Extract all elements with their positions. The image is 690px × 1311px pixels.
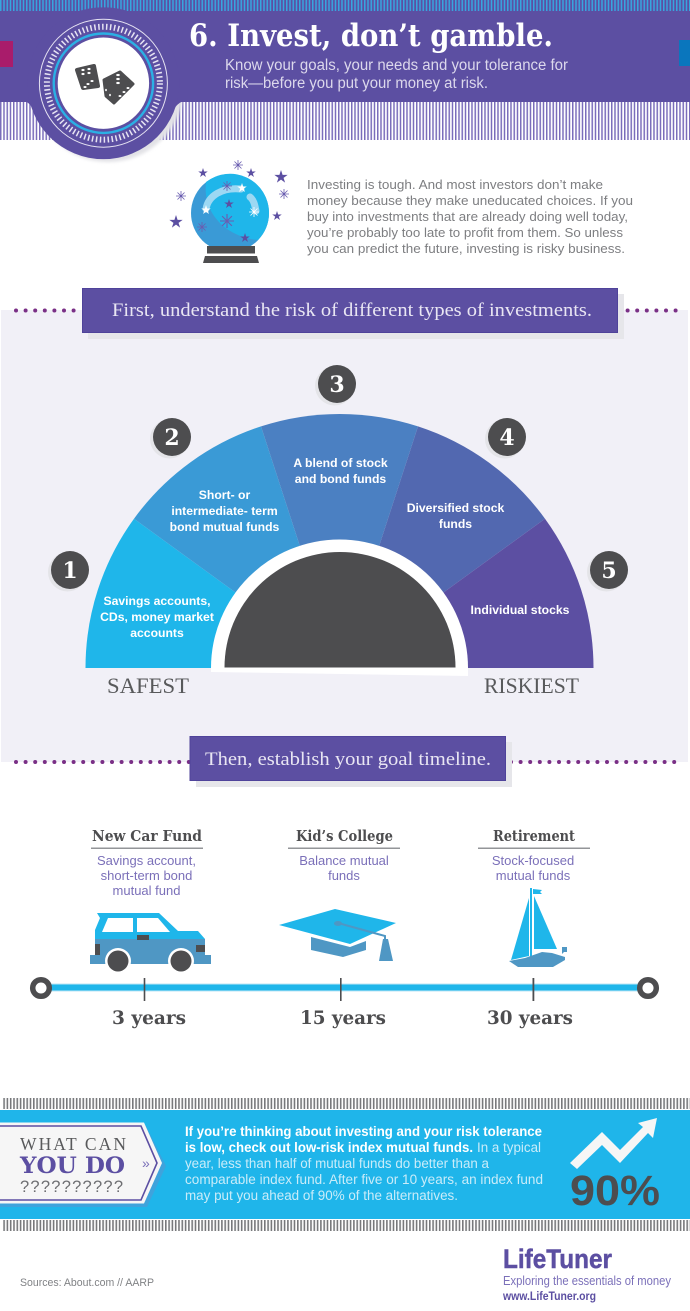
badge: number 5: 5 <box>601 558 617 584</box>
icon: rising arrow <box>570 1118 657 1169</box>
dotted rule: first banner <box>16 308 677 312</box>
chart: risk gauge <box>86 414 594 676</box>
panel: risk section background <box>1 310 688 762</box>
logo: LifeTuner: LifeTuner <box>503 1244 612 1274</box>
label: segment 2 <box>170 488 280 534</box>
icon: car <box>90 913 211 974</box>
badge: number 4: 4 <box>499 425 515 451</box>
badge: number 3: 3 <box>329 372 345 398</box>
badge: number 3 <box>315 365 356 406</box>
text block: index fund advice: In a typical <box>477 1140 541 1155</box>
callout: what can you do tag: YOU DO <box>19 1153 125 1179</box>
label: segment 2: bond mutual funds <box>170 520 280 534</box>
text block: index fund advice: year, less than half of mutual funds do better than a <box>185 1156 489 1171</box>
text: sources: Sources: About.com // AARP <box>20 1277 154 1289</box>
label: segment 3 <box>293 456 388 486</box>
label: segment 2: Short- or <box>199 488 250 502</box>
panel: what can you do band <box>0 1098 690 1231</box>
icon: magenta side tab <box>0 41 13 67</box>
text block: intro paragraph: Investing is tough. And most investors don’t make <box>307 177 603 192</box>
label: segment 4: funds <box>439 517 472 531</box>
subtitle: Know your goals, your needs and your tolerance for <box>225 57 568 74</box>
text block: index fund advice: If you’re thinking about investing and your risk tolerance <box>185 1124 542 1139</box>
label: segment 1: accounts <box>130 626 184 640</box>
label: segment 4: Diversified stock <box>407 501 504 515</box>
column: new car fund: mutual fund <box>113 883 180 898</box>
column: new car fund: New Car Fund <box>92 828 202 845</box>
text block: intro paragraph <box>307 177 633 256</box>
icon: dice medallion <box>39 19 167 147</box>
label: riskiest: RISKIEST <box>484 673 580 698</box>
badge: number 4 <box>485 418 526 458</box>
text block: index fund advice: is low, check out low-risk index mutual funds. <box>185 1140 473 1155</box>
banner: goal timeline <box>190 736 512 787</box>
column: new car fund <box>91 828 203 898</box>
text block: intro paragraph: money because they make uneducated choices. If you <box>307 193 633 208</box>
callout: what can you do tag: ?????????? <box>20 1178 123 1196</box>
column: retirement <box>478 828 590 883</box>
icon: crystal ball <box>169 160 289 263</box>
badge: number 2: 2 <box>164 425 180 451</box>
callout: what can you do tag: » <box>142 1155 150 1171</box>
icon: graduation cap <box>279 909 396 961</box>
label: segment 1 <box>100 594 214 640</box>
column: new car fund: Savings account, <box>97 853 196 868</box>
badge: number 5 <box>587 551 628 592</box>
label: segment 4 <box>407 501 504 531</box>
badge: number 1 <box>48 551 89 592</box>
label: segment 2: intermediate- term <box>171 504 278 518</box>
text block: intro paragraph: you can predict the future, investing is risky business. <box>307 241 625 256</box>
header band <box>0 0 690 162</box>
stat: 90%: 90% <box>570 1167 660 1215</box>
banner: understand the risk: First, understand the risk of different types of investments. <box>112 301 592 321</box>
banner: understand the risk <box>82 288 624 339</box>
label: segment 3: A blend of stock <box>293 456 388 470</box>
column: kid's college: funds <box>328 868 360 883</box>
label: segment 1: CDs, money market <box>100 610 214 624</box>
icon: sailboat <box>509 888 567 967</box>
logo: LifeTuner <box>502 1244 672 1303</box>
subtitle <box>225 57 568 92</box>
badge: number 1: 1 <box>62 558 78 584</box>
timeline <box>33 978 656 1001</box>
logo: LifeTuner: www.LifeTuner.org <box>502 1291 596 1303</box>
badge: number 2 <box>150 418 191 458</box>
column: kid's college <box>288 828 400 883</box>
icon: blue side tab <box>679 40 690 66</box>
column: kid's college: Kid’s College <box>296 828 393 845</box>
banner: goal timeline: Then, establish your goal timeline. <box>205 750 491 770</box>
label: safest: SAFEST <box>107 673 190 698</box>
label: segment 5: Individual stocks <box>471 603 570 617</box>
column: retirement: mutual funds <box>496 868 571 883</box>
label: segment 3: and bond funds <box>295 472 386 486</box>
label: 30 years: 30 years <box>487 1007 573 1029</box>
column: retirement: Stock-focused <box>492 853 574 868</box>
text block: index fund advice: comparable index fund. After five or 10 years, an index fund <box>185 1172 543 1187</box>
column: kid's college: Balance mutual <box>299 853 389 868</box>
column: new car fund: short-term bond <box>101 868 192 883</box>
label: 3 years: 3 years <box>112 1007 186 1029</box>
text block: intro paragraph: you’re probably too late to profit from them. So unless <box>307 225 624 240</box>
label: segment 1: Savings accounts, <box>103 594 211 608</box>
text block: intro paragraph: buy into investments that are already doing well today, <box>307 209 628 224</box>
label: 15 years: 15 years <box>300 1007 386 1029</box>
column: retirement: Retirement <box>493 828 575 845</box>
title: 6. Invest, don’t gamble. <box>189 18 553 54</box>
dotted rule: second banner <box>16 760 677 764</box>
callout: what can you do tag <box>0 1122 166 1207</box>
subtitle: risk—before you put your money at risk. <box>225 75 488 92</box>
callout: what can you do tag: WHAT CAN <box>20 1134 126 1154</box>
logo: LifeTuner: Exploring the essentials of money <box>503 1274 672 1288</box>
text block: index fund advice <box>185 1124 543 1203</box>
text block: index fund advice: may put you ahead of 90% of the alternatives. <box>185 1188 458 1203</box>
